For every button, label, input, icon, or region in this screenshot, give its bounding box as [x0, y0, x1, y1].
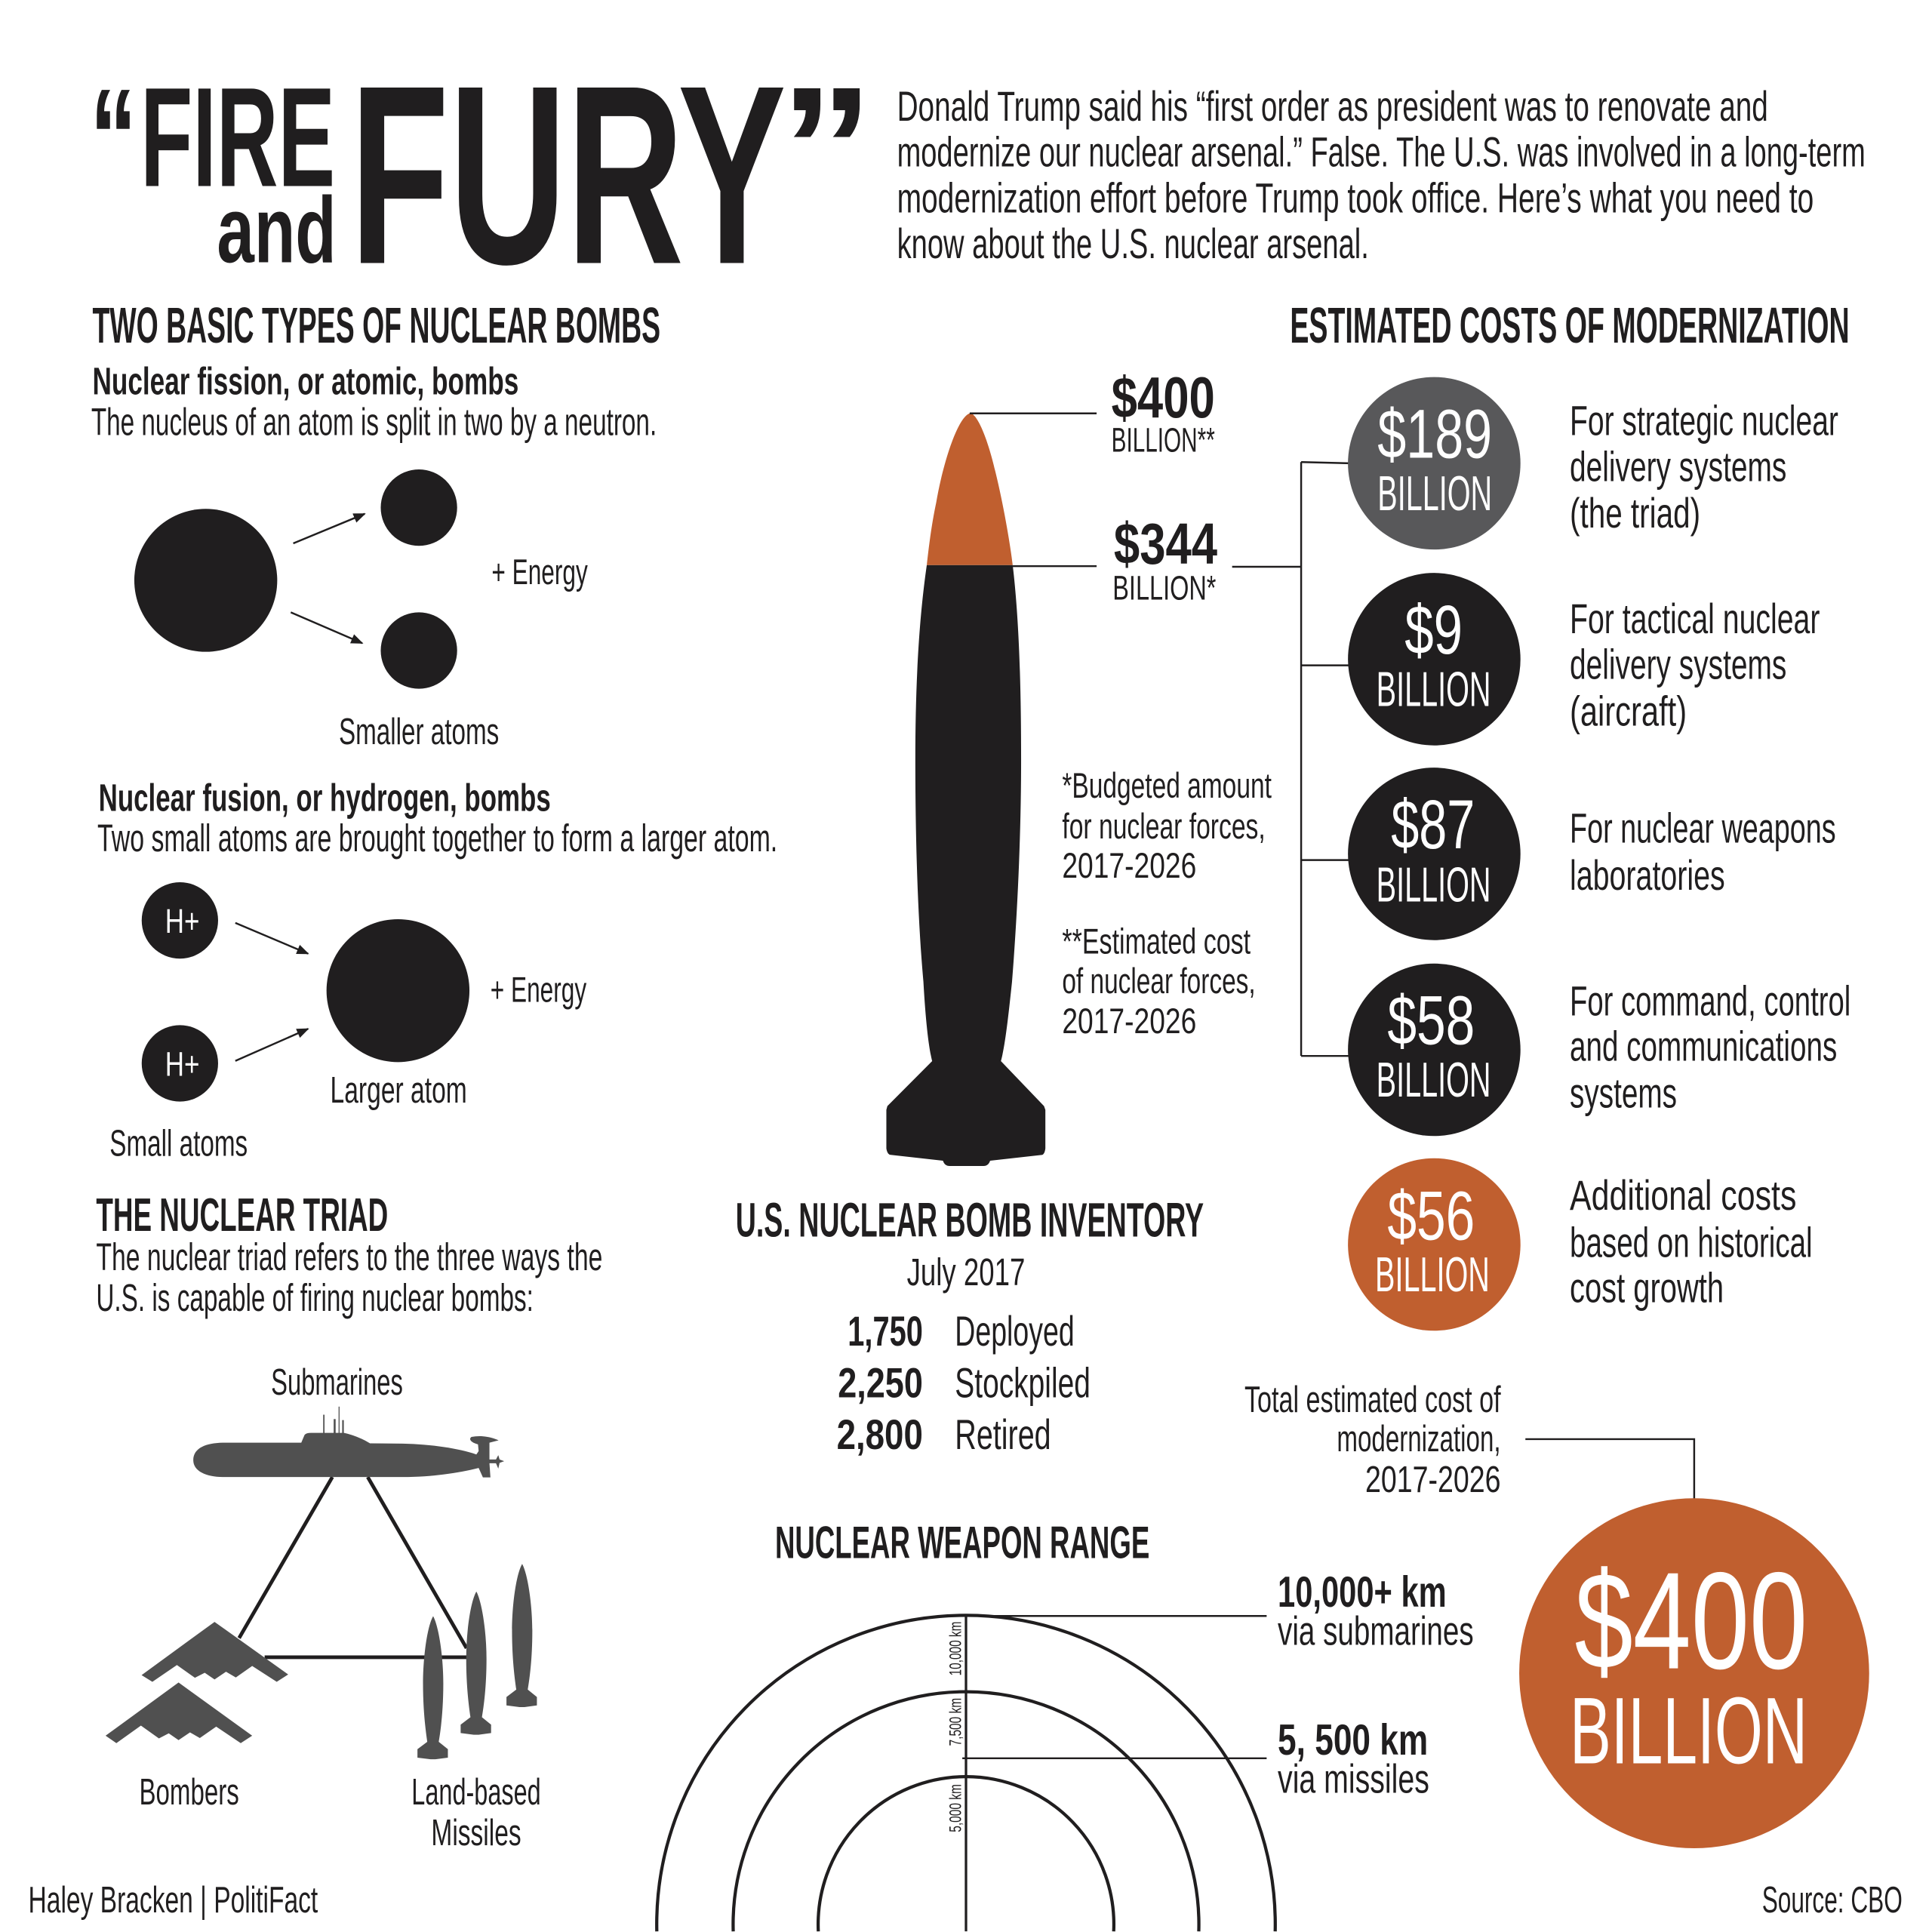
label: $400 billion: $400	[1112, 366, 1215, 430]
triad labels: Submarines	[271, 1362, 403, 1403]
triad labels: Missiles	[431, 1813, 521, 1854]
range: submarines	[1278, 1568, 1474, 1654]
cost item: $189 billion: delivery systems	[1570, 444, 1786, 491]
cost item: $9 billion	[1348, 573, 1820, 746]
inventory rows: 2,250	[838, 1359, 923, 1406]
label: $344 billion: $344	[1114, 512, 1217, 577]
heading: two basic types: TWO BASIC TYPES OF NUCLEAR BOMBS	[92, 297, 660, 354]
panel: nuclear triad	[96, 1189, 602, 1854]
fusion diagram: Larger atom	[331, 1070, 467, 1111]
cost item: $56 billion: $56	[1387, 1177, 1475, 1254]
inventory rows: 1,750	[848, 1308, 923, 1355]
triad diagram	[106, 1407, 537, 1759]
fusion diagram	[109, 882, 586, 1164]
title: ”	[780, 51, 874, 244]
title: “	[90, 60, 137, 214]
range arcs	[657, 1615, 1275, 1931]
inventory date: July 2017	[907, 1251, 1025, 1294]
cost item: $9 billion: delivery systems	[1570, 641, 1786, 688]
triad labels	[139, 1362, 541, 1854]
fission diagram	[134, 469, 588, 752]
big circle: $400 billion	[1519, 1498, 1869, 1848]
cost item: $87 billion	[1348, 768, 1836, 940]
icon: submarine	[193, 1407, 504, 1478]
inventory rows: Stockpiled	[955, 1359, 1091, 1406]
icon: missiles	[417, 1564, 537, 1759]
triad labels: Bombers	[139, 1772, 239, 1813]
intro paragraph: know about the U.S. nuclear arsenal.	[897, 220, 1369, 267]
icon: rocket	[886, 413, 1045, 1166]
fission description: The nucleus of an atom is split in two by a neutron.	[91, 400, 657, 443]
cost item: $56 billion: Additional costs	[1570, 1172, 1796, 1219]
range ring labels: 7,500 km	[946, 1698, 964, 1746]
credit: Haley Bracken | PolitiFact	[29, 1880, 318, 1921]
fusion heading: Nuclear fusion, or hydrogen, bombs	[99, 776, 551, 819]
inventory rows: Retired	[955, 1411, 1051, 1458]
fusion diagram: H+	[165, 902, 199, 940]
label: $344 billion: BILLION*	[1112, 568, 1217, 607]
triad description: The nuclear triad refers to the three ways the	[96, 1235, 602, 1278]
big circle: $400 billion: $400	[1575, 1543, 1807, 1698]
fission heading: Nuclear fission, or atomic, bombs	[92, 359, 518, 402]
footnotes: for nuclear forces,	[1062, 807, 1266, 847]
footnotes: **Estimated cost	[1062, 922, 1251, 962]
title	[90, 32, 874, 318]
cost item: $87 billion: $87	[1391, 786, 1475, 863]
fusion diagram: + Energy	[491, 970, 586, 1010]
cost item: $58 billion: $58	[1387, 983, 1475, 1060]
fusion diagram: H+	[165, 1044, 199, 1083]
cost item: $87 billion: BILLION	[1377, 857, 1491, 912]
range: missiles	[1278, 1716, 1429, 1802]
footnotes	[1062, 766, 1272, 1041]
fission diagram: + Energy	[491, 552, 588, 592]
range ring labels	[946, 1622, 964, 1832]
title: FIRE	[140, 58, 335, 217]
cost item: $9 billion: $9	[1404, 592, 1463, 669]
range ring labels: 5,000 km	[946, 1784, 964, 1832]
triad labels: Land-based	[411, 1772, 541, 1813]
cost item: $87 billion: laboratories	[1570, 852, 1725, 899]
label: $400 billion	[1112, 366, 1215, 459]
range: missiles: 5, 500 km	[1278, 1716, 1428, 1764]
cost item: $58 billion: systems	[1570, 1070, 1677, 1117]
cost item: $56 billion: cost growth	[1570, 1265, 1724, 1312]
heading: the nuclear triad: THE NUCLEAR TRIAD	[96, 1189, 388, 1241]
cost item: $189 billion: (the triad)	[1570, 490, 1700, 537]
cost item: $189 billion: BILLION	[1377, 466, 1492, 521]
panel: bomb inventory	[736, 1193, 1204, 1458]
label: $344 billion	[1112, 512, 1217, 607]
cost item: $9 billion: For tactical nuclear	[1570, 595, 1820, 642]
range: missiles: via missiles	[1278, 1757, 1429, 1802]
panel: two basic types of nuclear bombs	[91, 297, 777, 1164]
cost item: $56 billion: based on historical	[1570, 1219, 1813, 1266]
icon: bombers	[106, 1622, 288, 1743]
triad description: U.S. is capable of firing nuclear bombs:	[96, 1276, 534, 1319]
rocket leader lines	[970, 414, 1350, 1056]
cost item: $58 billion: BILLION	[1377, 1052, 1491, 1107]
total cost caption: modernization,	[1337, 1419, 1501, 1460]
cost item: $189 billion: $189	[1377, 396, 1492, 473]
inventory rows	[837, 1308, 1091, 1458]
inventory rows: Deployed	[955, 1308, 1075, 1355]
cost item: $9 billion: BILLION	[1377, 662, 1491, 717]
range: submarines: 10,000+ km	[1278, 1568, 1447, 1617]
footnotes: of nuclear forces,	[1062, 961, 1256, 1001]
cost item: $9 billion: (aircraft)	[1570, 688, 1687, 735]
range: submarines: via submarines	[1278, 1609, 1474, 1654]
panel: estimated costs of modernization	[1290, 297, 1850, 1331]
intro paragraph	[897, 83, 1866, 267]
panel: nuclear weapon range	[657, 1516, 1474, 1931]
total cost caption: Total estimated cost of	[1244, 1380, 1501, 1420]
triad description	[96, 1235, 602, 1319]
title: FURY	[350, 32, 786, 318]
title: and	[217, 179, 337, 283]
cost item: $58 billion	[1348, 964, 1850, 1136]
total cost caption	[1244, 1380, 1501, 1500]
heading: inventory: U.S. NUCLEAR BOMB INVENTORY	[736, 1193, 1204, 1247]
footnotes: *Budgeted amount	[1062, 766, 1272, 806]
cost item: $189 billion	[1348, 377, 1838, 549]
label: $400 billion: BILLION**	[1112, 420, 1215, 459]
total cost caption: 2017-2026	[1365, 1460, 1501, 1500]
fusion diagram: Small atoms	[109, 1123, 248, 1164]
range ring labels: 10,000 km	[946, 1622, 964, 1675]
big circle: $400 billion: BILLION	[1570, 1677, 1807, 1783]
panel: total estimated cost	[1244, 1380, 1869, 1848]
heading: weapon range: NUCLEAR WEAPON RANGE	[775, 1516, 1149, 1567]
fission diagram: Smaller atoms	[339, 712, 499, 752]
cost item: $56 billion	[1348, 1158, 1813, 1331]
fusion description: Two small atoms are brought together to form a larger atom.	[97, 817, 777, 860]
footnotes: 2017-2026	[1062, 1001, 1196, 1041]
chart: rocket cost comparison	[886, 366, 1350, 1166]
footnotes: 2017-2026	[1062, 846, 1196, 886]
cost item: $56 billion: BILLION	[1375, 1247, 1490, 1302]
inventory rows: 2,800	[837, 1411, 923, 1458]
